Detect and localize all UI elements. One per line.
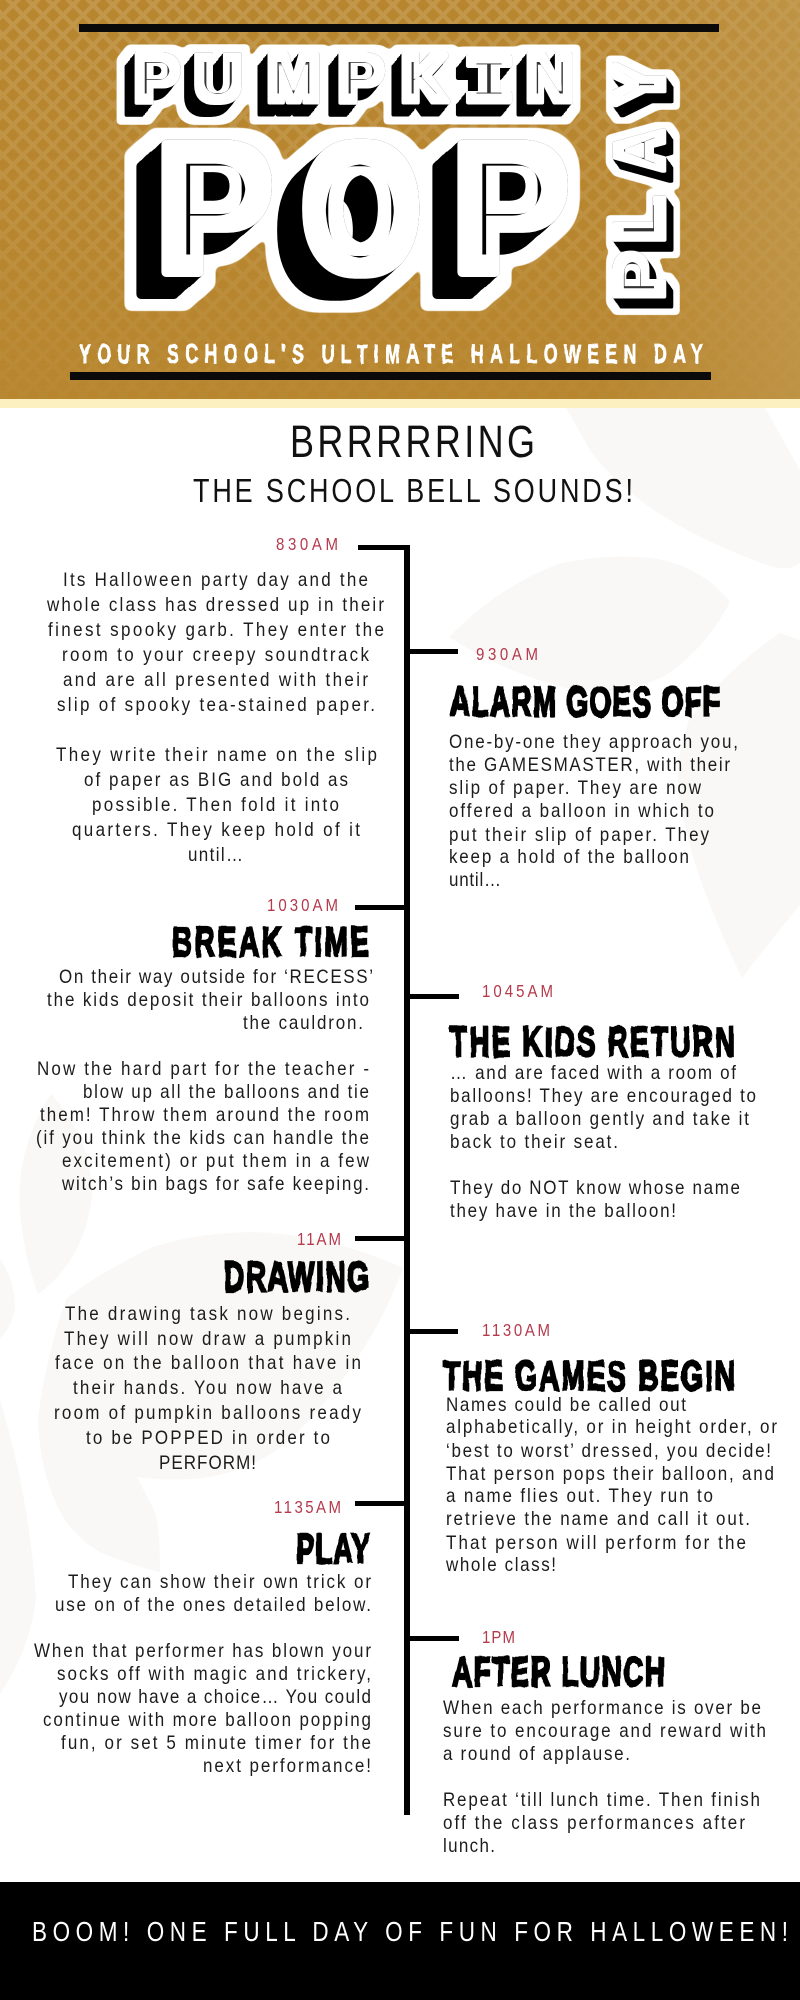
body text: socks off with magic and trickery, bbox=[57, 1663, 371, 1684]
PUMPKIN title word: P bbox=[139, 50, 174, 106]
event: 1130am bbox=[443, 1321, 777, 1575]
body text: excitement) or put them in a few bbox=[62, 1150, 370, 1171]
tagline: YOUR SCHOOL'S ULTIMATE HALLOWEEN DAY bbox=[79, 338, 703, 369]
heading: the school bell sounds: THE SCHOOL BELL SOUNDS! bbox=[193, 472, 633, 510]
body text bbox=[450, 1062, 756, 1221]
POP title word: P bbox=[456, 106, 564, 310]
PLAY vertical word: Y bbox=[613, 69, 667, 100]
body text: and are all presented with their bbox=[63, 669, 368, 690]
body text: a name flies out. They run to bbox=[446, 1485, 713, 1506]
PUMPKIN title word: I bbox=[465, 47, 513, 123]
body text bbox=[54, 1303, 362, 1473]
body text: you now have a choice… You could bbox=[59, 1686, 371, 1707]
PUMPKIN title word: K bbox=[406, 50, 441, 106]
body text: retrieve the name and call it out. bbox=[446, 1508, 750, 1529]
heading: THE GAMES BEGIN bbox=[443, 1352, 735, 1399]
bottom rule bbox=[70, 372, 711, 380]
body text: possible. Then fold it into bbox=[92, 794, 339, 815]
body text: to be POPPED in order to bbox=[86, 1427, 330, 1448]
event: 1135am bbox=[34, 1498, 371, 1776]
PLAY vertical word: A bbox=[601, 132, 679, 170]
body text bbox=[443, 1697, 766, 1856]
body text: Now the hard part for the teacher - bbox=[37, 1058, 369, 1079]
timeline spine and ticks bbox=[355, 545, 459, 1815]
body text: That person will perform for the bbox=[446, 1532, 746, 1553]
body text: until… bbox=[188, 844, 243, 865]
time label: 11AM bbox=[297, 1230, 341, 1249]
time label: 1PM bbox=[482, 1628, 515, 1647]
body text: On their way outside for ‘RECESS’ bbox=[59, 966, 373, 987]
PUMPKIN title word: I bbox=[468, 54, 510, 111]
gold background bbox=[0, 0, 800, 399]
body text bbox=[445, 1394, 777, 1575]
POP title word: P bbox=[172, 128, 256, 290]
body text: back to their seat. bbox=[450, 1131, 618, 1152]
body text: Its Halloween party day and the bbox=[63, 569, 368, 590]
PUMPKIN title word: U bbox=[195, 41, 241, 116]
body text bbox=[34, 1571, 371, 1776]
body text: they have in the balloon! bbox=[450, 1200, 676, 1221]
body text bbox=[449, 731, 738, 890]
lighter right side wash bbox=[600, 0, 800, 399]
body text: slip of spooky tea-stained paper. bbox=[57, 694, 375, 715]
footer band bbox=[0, 1882, 800, 2000]
PUMPKIN title word: U bbox=[199, 50, 237, 106]
POP title word: O bbox=[316, 131, 403, 292]
body text bbox=[46, 569, 384, 865]
body text: PERFORM! bbox=[159, 1452, 256, 1473]
body text: (if you think the kids can handle the bbox=[36, 1127, 369, 1148]
PUMPKIN title word: P bbox=[343, 50, 378, 106]
body text: witch’s bin bags for safe keeping. bbox=[61, 1173, 369, 1194]
body text: their hands. You now have a bbox=[73, 1377, 343, 1398]
heading: DRAWING bbox=[224, 1253, 369, 1300]
body text: the kids deposit their balloons into bbox=[47, 989, 369, 1010]
body text: One-by-one they approach you, bbox=[449, 731, 738, 752]
body text: They can show their own trick or bbox=[68, 1571, 371, 1592]
PLAY vertical word bbox=[600, 66, 679, 298]
body text: put their slip of paper. They bbox=[449, 824, 710, 845]
PLAY vertical word: L bbox=[613, 201, 666, 238]
body text: … and are faced with a room of bbox=[450, 1062, 737, 1083]
POP title word: P bbox=[468, 128, 552, 290]
PUMPKIN title word: P bbox=[135, 41, 178, 116]
body text: slip of paper. They are now bbox=[449, 777, 702, 798]
body text: offered a balloon in which to bbox=[449, 800, 714, 821]
heading: brrrrring: BRRRRRING bbox=[290, 416, 535, 467]
body text: keep a hold of the balloon bbox=[449, 846, 689, 867]
body text: The drawing task now begins. bbox=[65, 1303, 350, 1324]
body text: the cauldron. bbox=[243, 1012, 363, 1033]
POP title word bbox=[160, 106, 564, 310]
footer text: BOOM! ONE FULL DAY OF FUN FOR HALLOWEEN! bbox=[32, 1917, 788, 1947]
body text: grab a balloon gently and take it bbox=[450, 1108, 749, 1129]
body text: fun, or set 5 minute timer for the bbox=[61, 1732, 371, 1753]
PUMPKIN title word: P bbox=[339, 41, 382, 116]
body text: continue with more balloon popping bbox=[43, 1709, 371, 1730]
PLAY vertical word: P bbox=[600, 253, 679, 298]
body text bbox=[36, 966, 373, 1194]
body text: of paper as BIG and bold as bbox=[84, 769, 348, 790]
event: 830am bbox=[46, 535, 384, 865]
PLAY vertical word: P bbox=[612, 257, 666, 294]
body text: off the class performances after bbox=[443, 1812, 745, 1833]
body text: When each performance is over be bbox=[443, 1697, 761, 1718]
time label: 1130AM bbox=[482, 1321, 550, 1340]
body text: They write their name on the slip bbox=[56, 744, 377, 765]
PUMPKIN title word: K bbox=[402, 41, 446, 116]
body text: ‘best to worst’ dressed, you decide! bbox=[446, 1440, 771, 1461]
time label: 1030AM bbox=[267, 896, 338, 915]
event: 1pm bbox=[443, 1628, 766, 1856]
body text: quarters. They keep hold of it bbox=[72, 819, 360, 840]
body text: balloons! They are encouraged to bbox=[450, 1085, 756, 1106]
body text: They do NOT know whose name bbox=[450, 1177, 740, 1198]
body text: whole class has dressed up in their bbox=[46, 594, 384, 615]
event: 11am bbox=[54, 1230, 369, 1473]
POP title word: O bbox=[307, 111, 415, 307]
body text: lunch. bbox=[443, 1835, 495, 1856]
heading: THE KIDS RETURN bbox=[450, 1018, 735, 1065]
event: 930am bbox=[449, 645, 738, 890]
body text: a round of applause. bbox=[443, 1743, 630, 1764]
background leaves bbox=[0, 408, 800, 1694]
time label: 1135AM bbox=[274, 1498, 341, 1517]
PUMPKIN title word: M bbox=[268, 41, 319, 116]
body text: finest spooky garb. They enter the bbox=[48, 619, 384, 640]
heading: ALARM GOES OFF bbox=[450, 678, 720, 725]
event: 1045am bbox=[450, 982, 756, 1221]
heading: AFTER LUNCH bbox=[452, 1648, 665, 1695]
cream strip bbox=[0, 399, 800, 408]
body text: face on the balloon that have in bbox=[55, 1352, 361, 1373]
body text: until… bbox=[449, 869, 501, 890]
body text: room of pumpkin balloons ready bbox=[54, 1402, 362, 1423]
diamond lattice pattern bbox=[0, 0, 800, 340]
PLAY vertical word: L bbox=[600, 199, 678, 241]
body text: them! Throw them around the room bbox=[40, 1104, 369, 1125]
body text: alphabetically, or in height order, or bbox=[446, 1416, 777, 1437]
body text: When that performer has blown your bbox=[34, 1640, 371, 1661]
POP title word: P bbox=[160, 106, 268, 310]
time label: 1045AM bbox=[482, 982, 553, 1001]
body text: use on of the ones detailed below. bbox=[55, 1594, 371, 1615]
body text: Repeat ‘till lunch time. Then finish bbox=[443, 1789, 760, 1810]
body text: That person pops their balloon, and bbox=[446, 1463, 774, 1484]
body text: next performance! bbox=[203, 1755, 371, 1776]
body text: Names could be called out bbox=[446, 1394, 686, 1415]
PUMPKIN title word: M bbox=[272, 50, 315, 106]
time label: 930AM bbox=[476, 645, 538, 664]
header banner bbox=[0, 0, 800, 408]
body text: sure to encourage and reward with bbox=[443, 1720, 766, 1741]
top rule bbox=[79, 24, 719, 32]
PUMPKIN title word bbox=[135, 41, 572, 123]
body text: room to your creepy soundtrack bbox=[62, 644, 370, 665]
heading: PLAY bbox=[296, 1525, 370, 1572]
body text: whole class! bbox=[445, 1554, 556, 1575]
event: 1030am bbox=[36, 896, 373, 1194]
body text: blow up all the balloons and tie bbox=[83, 1081, 369, 1102]
time label: 830AM bbox=[276, 535, 338, 554]
PUMPKIN title word: N bbox=[527, 41, 572, 116]
PLAY vertical word: A bbox=[613, 134, 667, 166]
body text: They will now draw a pumpkin bbox=[64, 1328, 351, 1349]
PUMPKIN title word: N bbox=[531, 50, 569, 106]
body text: the GAMESMASTER, with their bbox=[449, 754, 730, 775]
heading: BREAK TIME bbox=[172, 918, 369, 965]
PLAY vertical word: Y bbox=[601, 66, 679, 104]
